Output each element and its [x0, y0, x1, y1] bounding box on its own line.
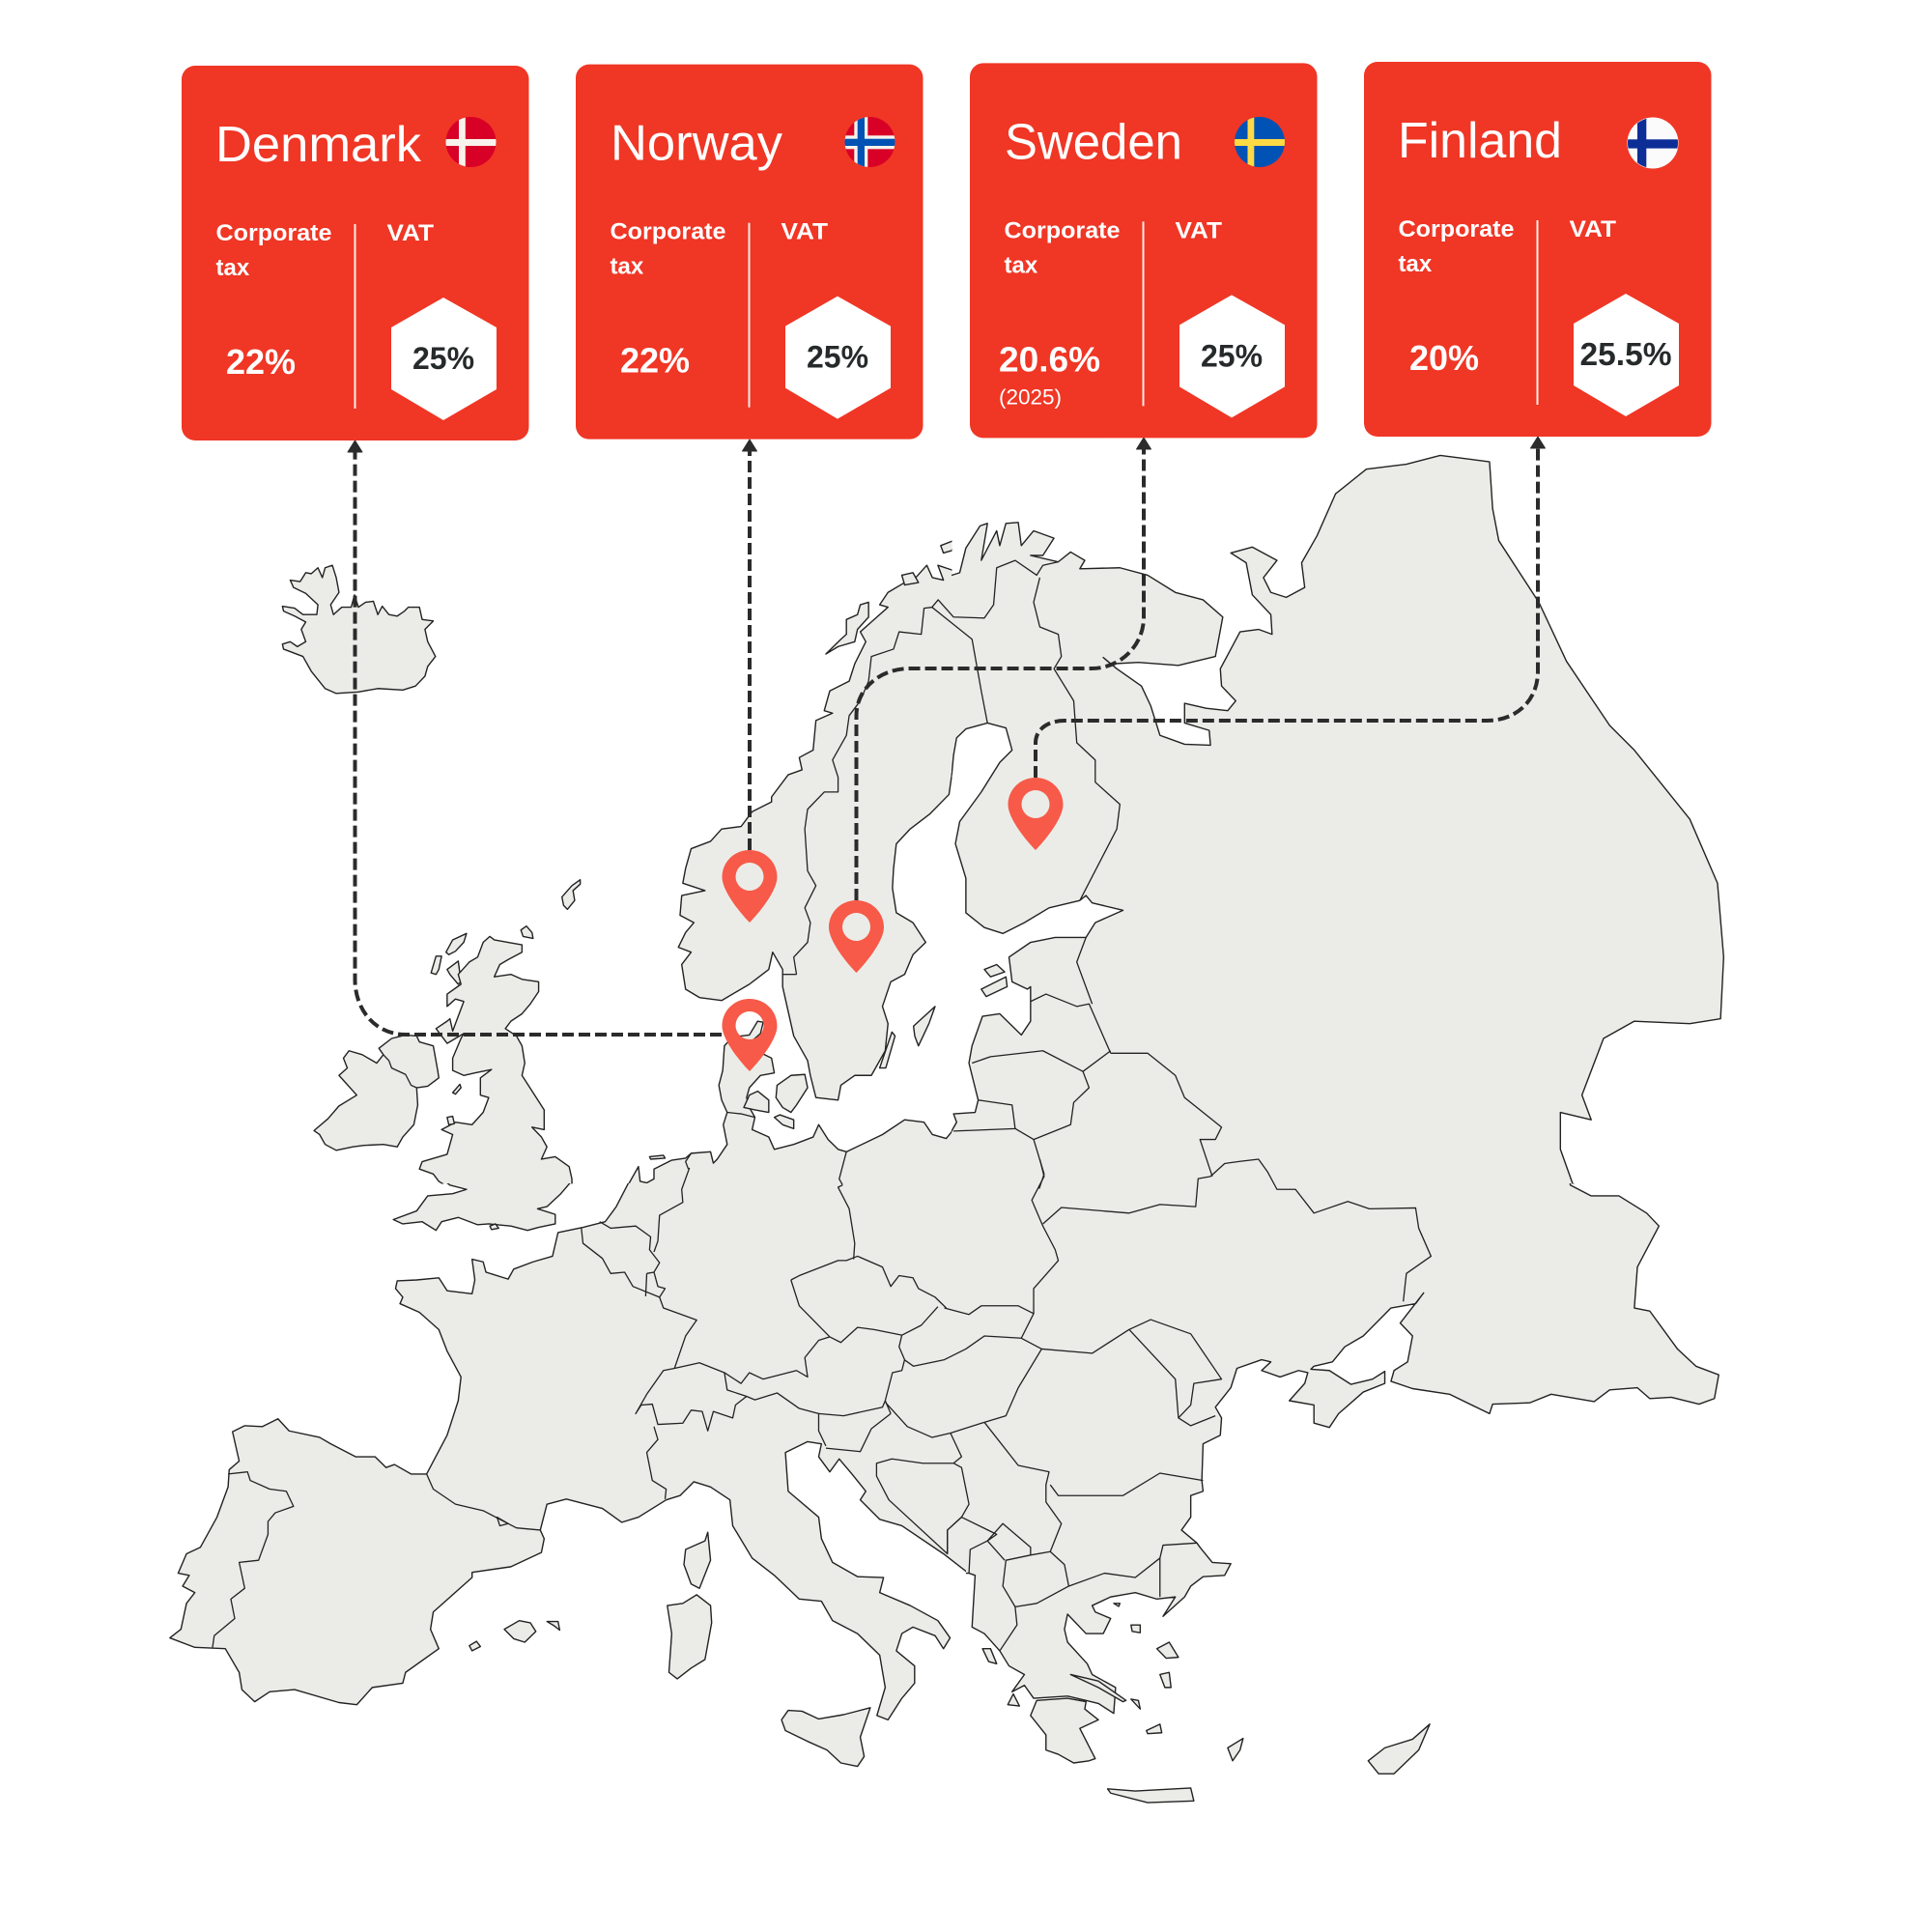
label: VAT: VAT — [1569, 216, 1616, 242]
icon: Norway map pin — [723, 850, 777, 923]
value: corporate tax rate: 20.6% — [999, 339, 1100, 379]
value: corporate tax rate: 20% — [1409, 338, 1479, 378]
label: corporate tax: Corporate — [216, 220, 332, 246]
label: corporate tax: tax — [611, 254, 644, 280]
icon: Finland map pin — [1009, 778, 1063, 850]
icon: Sweden flag — [1235, 117, 1285, 167]
map of Europe — [170, 455, 1723, 1803]
label: corporate tax: tax — [216, 255, 250, 281]
map: south-west Europe, France, Iberia, Italy, southern Britain — [169, 1183, 966, 1768]
heading: Denmark: Denmark — [215, 117, 422, 173]
icon: Norway flag — [844, 117, 895, 167]
map: western country borders — [213, 1168, 947, 1647]
hexagon: VAT rate — [1574, 294, 1679, 416]
arrow: Denmark pin to Denmark card — [348, 440, 722, 1035]
hexagon: VAT rate — [1179, 295, 1285, 417]
icon: Sweden map pin — [829, 900, 884, 973]
arrow: Finland pin to Finland card — [1036, 437, 1546, 778]
panel: Sweden — [970, 63, 1318, 438]
value: corporate tax rate: 22% — [226, 342, 296, 382]
panel: Norway — [576, 65, 923, 440]
value: corporate tax rate: 22% — [620, 341, 690, 381]
map: north-west Europe, Iceland, British Isles, Norway, Sweden — [282, 541, 952, 1184]
hexagon: VAT rate — [785, 297, 891, 419]
map: eastern and Balkan country borders — [876, 1159, 1431, 1651]
label: corporate tax: Corporate — [611, 219, 726, 245]
heading: Sweden: Sweden — [1005, 114, 1182, 170]
icon: Finland flag — [1627, 117, 1679, 169]
hexagon: VAT rate — [391, 298, 497, 420]
icon: Denmark map pin — [723, 999, 777, 1071]
hexagon: VAT rate: 25% — [1201, 338, 1263, 373]
heading: Norway: Norway — [611, 116, 782, 172]
label: corporate tax: tax — [1399, 251, 1433, 277]
panel: Denmark — [182, 66, 529, 440]
note: year: (2025) — [999, 384, 1062, 409]
label: VAT: VAT — [1175, 217, 1222, 243]
label: corporate tax: Corporate — [1005, 217, 1121, 243]
map: north-eastern country borders — [932, 560, 1222, 1189]
hexagon: VAT rate: 25% — [412, 341, 474, 376]
map: south-east Europe, Balkans, Ukraine, Greece, Cyprus — [966, 1183, 1719, 1804]
label: corporate tax: Corporate — [1399, 216, 1515, 242]
hexagon: VAT rate: 25% — [807, 340, 868, 375]
label: VAT: VAT — [781, 219, 828, 245]
map: Baltic Sea islands — [880, 964, 1008, 1068]
map: north-east Europe, Finland, Baltics, Russia — [952, 454, 1724, 1184]
label: corporate tax: tax — [1005, 252, 1038, 278]
hexagon: VAT rate: 25.5% — [1580, 337, 1671, 373]
icon: Denmark flag — [446, 117, 497, 167]
label: VAT: VAT — [386, 220, 434, 246]
map: northern country borders — [384, 608, 932, 1185]
arrow: Sweden pin to Sweden card — [856, 438, 1151, 900]
arrow: Norway pin to Norway card — [742, 440, 757, 850]
panel: Finland — [1364, 62, 1712, 437]
heading: Finland: Finland — [1398, 113, 1562, 169]
